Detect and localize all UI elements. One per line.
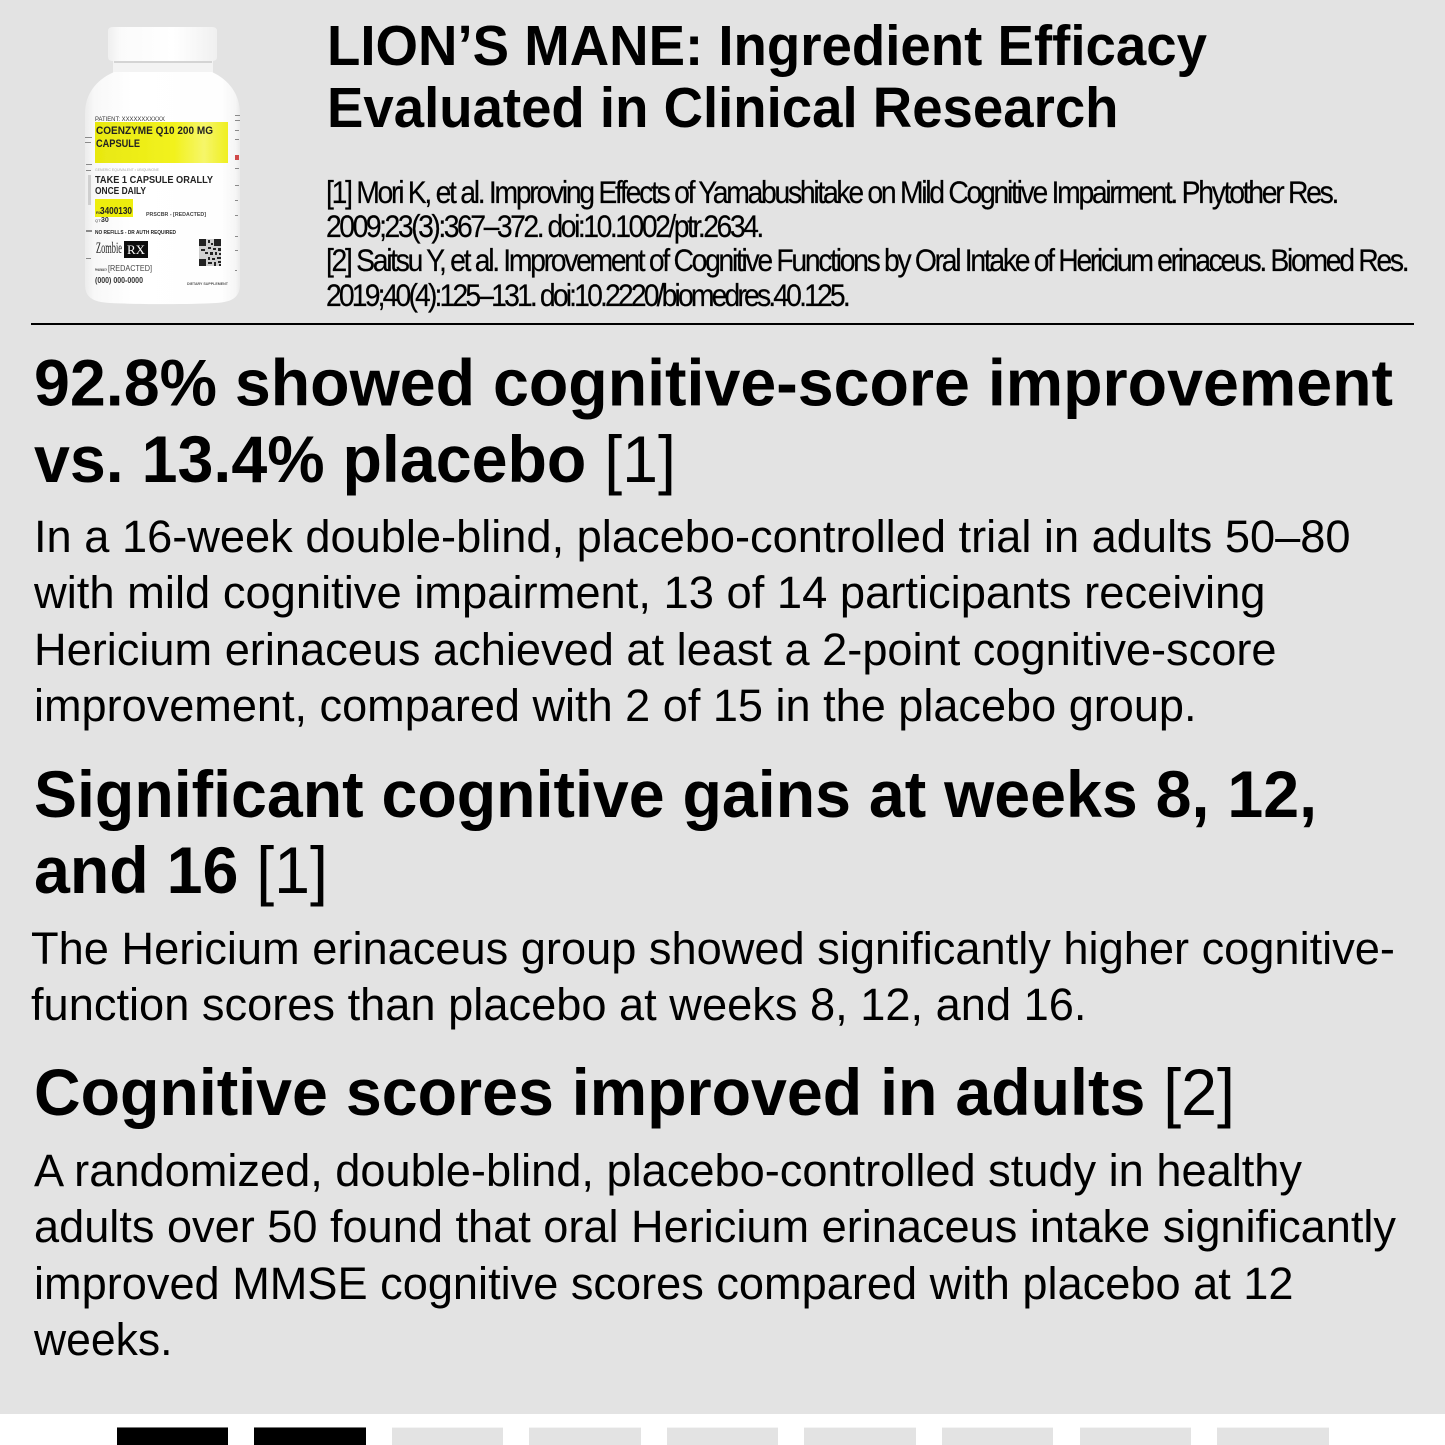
bottle cap (108, 27, 217, 61)
generic equivalent line: GENERIC EQUIVALENT • UBIQUINONE (95, 167, 159, 172)
dosage instructions (95, 175, 213, 197)
references: [1] Mori K, et al. Improving Effects of Yamabushitake on Mild Cognitive Impairment. Phytother Res. (326, 176, 1339, 210)
section 1 heading: 92.8% showed cognitive-score improvement (34, 346, 1393, 420)
dosage instructions: ONCE DAILY (95, 186, 146, 197)
bottle body (85, 72, 240, 304)
section 3 body: A randomized, double-blind, placebo-controlled study in healthy (34, 1145, 1303, 1196)
section 1 body: In a 16-week double-blind, placebo-controlled trial in adults 50–80 (34, 511, 1350, 562)
references: [2] Saitsu Y, et al. Improvement of Cognitive Functions by Oral Intake of Hericium erinaceus. Biomed Res. (326, 244, 1410, 278)
product image: supplement bottle (85, 27, 240, 304)
section 2 body (31, 923, 1395, 1030)
section 3 heading: Cognitive scores improved in adults [2] (34, 1055, 1235, 1129)
section 3 body (33, 1145, 1397, 1365)
section 3 body: weeks. (33, 1314, 172, 1365)
section 3 body: improved MMSE cognitive scores compared with placebo at 12 (34, 1258, 1294, 1309)
section 2 heading: and 16 [1] (34, 833, 328, 907)
references: 2019;40(4):125–131. doi:10.2220/biomedres.40.125. (326, 279, 851, 313)
title (327, 14, 1207, 140)
refills note: NO REFILLS - DR AUTH REQUIRED (95, 230, 176, 236)
pharmacy line: [REDACTED] (108, 264, 152, 273)
patient line: PATIENT: XXXXXXXXXXX (95, 116, 166, 123)
phone: (000) 000-0000 (95, 276, 143, 285)
references (326, 176, 1410, 313)
section 2 body: The Hericium erinaceus group showed significantly higher cognitive- (31, 923, 1395, 974)
references: 2009;23(3):367–372. doi:10.1002/ptr.2634. (326, 210, 764, 244)
section 1 body: with mild cognitive impairment, 13 of 14 participants receiving (33, 567, 1265, 618)
bottle neck (113, 58, 213, 82)
side label fine print (85, 115, 240, 271)
dietary supplement note: DIETARY SUPPLEMENT (187, 281, 228, 286)
section 2 body: function scores than placebo at weeks 8, 12, and 16. (31, 979, 1086, 1030)
yellow drug name band: CAPSULE (96, 138, 140, 150)
section 2 heading: Significant cognitive gains at weeks 8, 12, (34, 757, 1317, 831)
QR code (199, 239, 221, 266)
brand logo: RX (127, 242, 146, 257)
pharmacy line: PHARMACY (95, 268, 107, 272)
yellow drug name band: COENZYME Q10 200 MG (96, 125, 213, 137)
section 1 body: Hericium erinaceus achieved at least a 2-point cognitive-score (34, 624, 1276, 675)
prescriber: PRSCBR - [REDACTED] (146, 212, 206, 218)
section 1 heading: vs. 13.4% placebo [1] (34, 422, 676, 496)
section 3 body: adults over 50 found that oral Hericium erinaceus intake significantly (34, 1201, 1397, 1252)
section 1 body (33, 511, 1350, 731)
quantity: 30 (101, 217, 109, 224)
quantity: QTY (95, 218, 104, 223)
prescription number: 3400130 (100, 205, 132, 217)
section 1 body: improvement, compared with 2 of 15 in the placebo group. (34, 680, 1197, 731)
section 2 heading (34, 757, 1317, 907)
prescription number (95, 199, 133, 217)
prescription number: RX (96, 210, 102, 215)
title: Evaluated in Clinical Research (327, 76, 1118, 140)
title: LION’S MANE: Ingredient Efficacy (327, 14, 1207, 78)
section 1 heading (34, 346, 1393, 496)
dosage instructions: TAKE 1 CAPSULE ORALLY (95, 175, 213, 186)
quantity (95, 217, 109, 224)
brand logo: Zombie (96, 240, 122, 257)
page progress indicator (117, 1427, 1329, 1445)
yellow drug name band (95, 122, 228, 163)
